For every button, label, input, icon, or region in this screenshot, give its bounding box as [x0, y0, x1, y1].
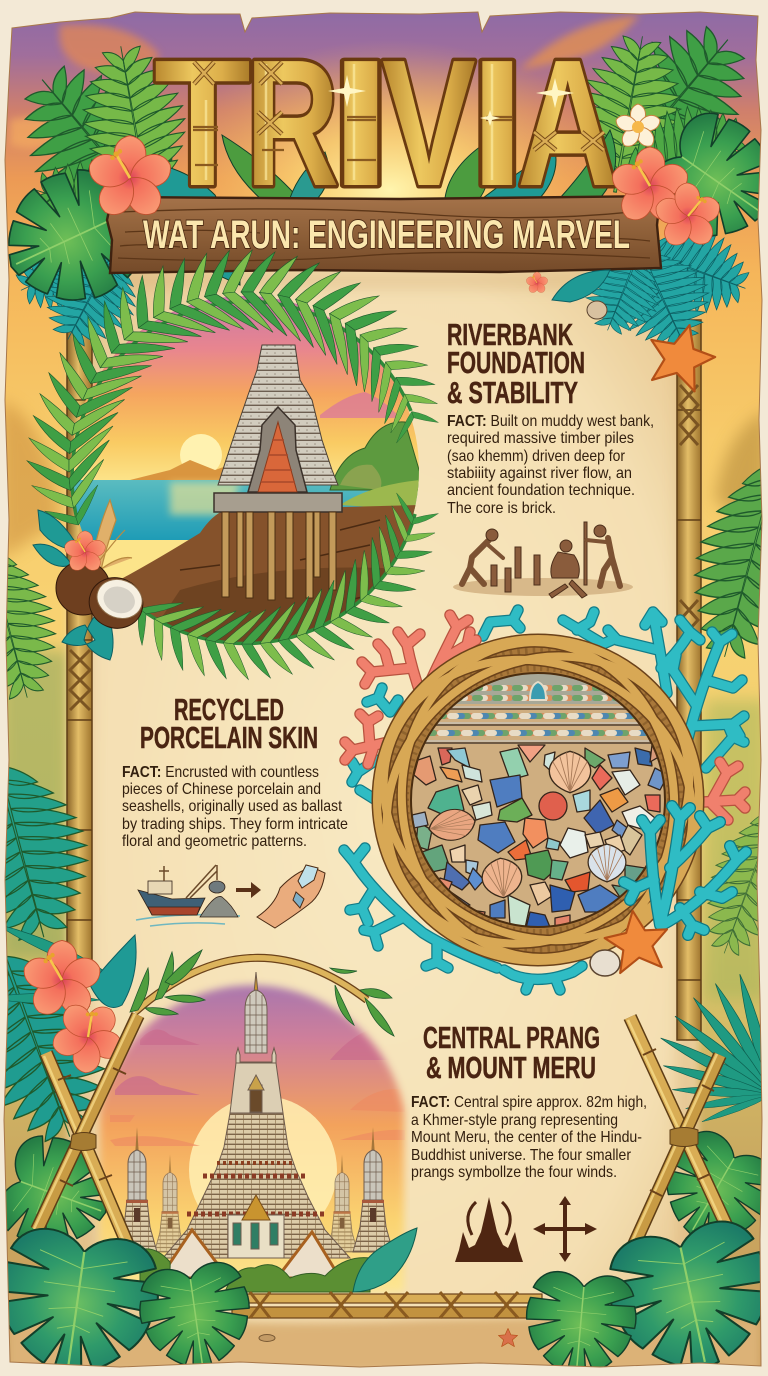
icon: starfish	[641, 317, 721, 394]
text: prang fact: Buddhist universe. The four smaller	[411, 1147, 631, 1164]
text: prang fact: prangs symbollze the four winds.	[411, 1164, 617, 1181]
title: R	[246, 23, 339, 224]
heading: central prang: & MOUNT MERU	[426, 1050, 596, 1085]
icon: workers driving piles	[453, 522, 633, 598]
teal leaf	[353, 1228, 417, 1292]
title: I	[329, 22, 393, 223]
text: prang fact: a Khmer-style prang representing	[411, 1112, 618, 1129]
corals behind wreath	[344, 610, 745, 990]
text: prang fact	[411, 1094, 647, 1181]
panel: riverbank scene	[70, 296, 425, 650]
coconuts and small leaves	[33, 500, 150, 660]
upper palm arc	[26, 248, 441, 534]
heading: riverbank foundation	[447, 317, 585, 410]
coral in front	[624, 806, 746, 935]
arrow: ship to hand	[236, 882, 261, 898]
sand floor	[8, 1310, 760, 1372]
woven wreath	[331, 598, 745, 1002]
heading: central prang: CENTRAL PRANG	[423, 1020, 600, 1055]
heading: recycled porcelain: PORCELAIN SKIN	[140, 720, 318, 755]
title backing leaves	[0, 99, 768, 325]
text: porcelain fact: by trading ships. They form intricate	[122, 816, 348, 833]
icon: four winds arrows	[533, 1196, 597, 1262]
text: prang fact: FACT: Central spire approx. 82m high,	[411, 1094, 647, 1111]
title	[154, 22, 618, 224]
top flowers	[85, 136, 731, 294]
sparkles	[328, 75, 574, 126]
starfish and shell	[590, 906, 672, 976]
text: porcelain fact: FACT: Encrusted with countless	[122, 764, 319, 781]
heading: recycled porcelain	[140, 692, 318, 755]
bushes	[140, 1249, 370, 1292]
icon: plumeria	[614, 104, 662, 150]
text: porcelain fact	[122, 764, 348, 850]
text: riverbank fact: required massive timber piles	[447, 430, 634, 447]
top-left palm fronds	[0, 36, 221, 278]
panel: mosaic wreath	[331, 598, 746, 1002]
text: porcelain fact: seashells, originally used as ballast	[122, 798, 343, 815]
heading: riverbank foundation: FOUNDATION	[447, 345, 585, 380]
heading: recycled porcelain: RECYCLED	[174, 692, 284, 727]
heading: riverbank foundation: & STABILITY	[447, 375, 578, 410]
bamboo nodes and lashings	[193, 62, 604, 180]
bottom decorative pebbles	[259, 1328, 518, 1347]
temple cutaway	[214, 345, 342, 600]
icon: cargo ship with ballast	[136, 865, 240, 926]
title: T	[154, 23, 251, 223]
top teal palms	[3, 207, 760, 362]
title: A	[517, 23, 618, 224]
bamboo weave footer	[232, 1292, 542, 1318]
text: porcelain fact: floral and geometric patterns.	[122, 833, 307, 850]
text: riverbank fact: ancient foundation technique.	[447, 482, 635, 499]
text: riverbank fact: stabiiity against river flow, an	[447, 465, 632, 482]
text: riverbank fact: (sao khemm) driven deep for	[447, 448, 625, 465]
left leaves and crossed bamboo	[0, 918, 140, 1264]
central prang	[160, 972, 350, 1278]
icon: teal leaf and shell	[552, 270, 610, 319]
icon: prang silhouette	[455, 1197, 523, 1262]
lower palm arc	[123, 493, 440, 681]
title: V	[382, 23, 476, 224]
text: porcelain fact: pieces of Chinese porcelain and	[122, 781, 321, 798]
text: prang fact: Mount Meru, the center of the Hindu-	[411, 1129, 642, 1146]
right fan fern and crossed bamboo	[628, 972, 768, 1260]
icon: hand holding shards	[257, 865, 325, 928]
parchment panel	[68, 258, 700, 1376]
mosaic	[412, 674, 664, 926]
heading: central prang	[423, 1020, 600, 1085]
heading: riverbank foundation: RIVERBANK	[447, 317, 573, 352]
bamboo frame posts	[67, 320, 701, 1040]
top-right palm fronds	[550, 0, 768, 234]
side palm fronds	[0, 436, 768, 1159]
text: riverbank fact: The core is brick.	[447, 500, 556, 517]
text: riverbank fact: FACT: Built on muddy west bank,	[447, 413, 654, 430]
sign board	[107, 196, 661, 273]
text: riverbank fact	[447, 413, 654, 517]
panel: wat arun scene	[95, 955, 410, 1295]
bottom monstera leaves	[0, 1214, 768, 1376]
title: I	[468, 23, 526, 224]
bamboo arch with leaves	[130, 950, 394, 1036]
